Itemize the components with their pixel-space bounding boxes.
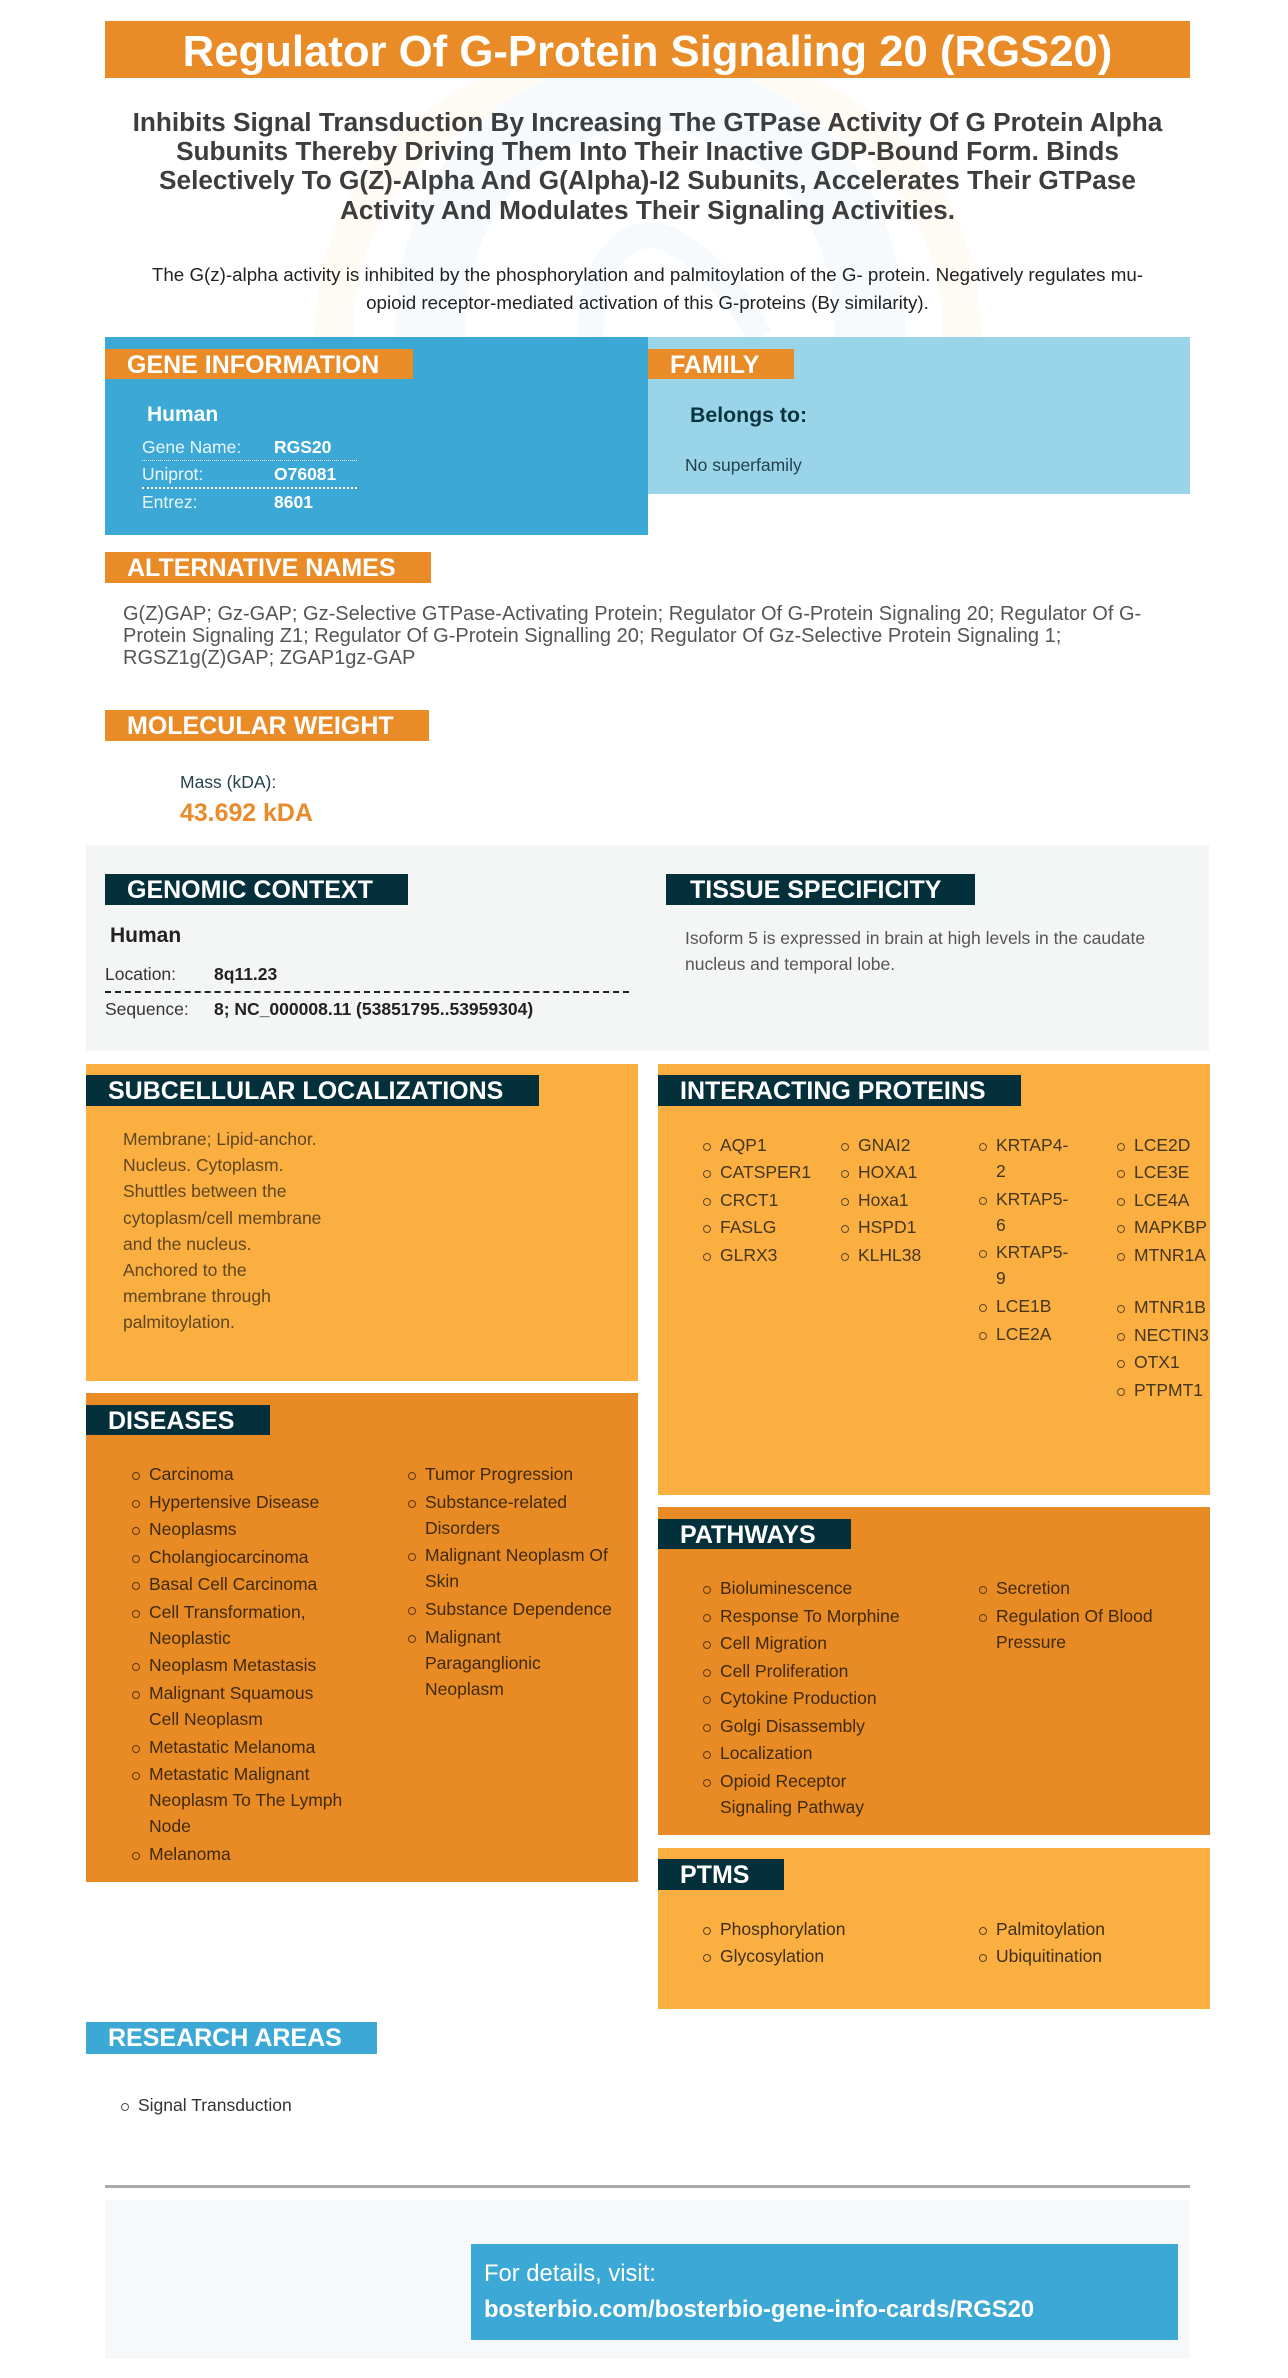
panel: interacting proteins xyxy=(658,1064,1210,1495)
ptm list: Glycosylation xyxy=(720,1946,824,1966)
disease list: Metastatic Melanoma xyxy=(149,1737,315,1757)
disease list: Tumor Progression xyxy=(425,1464,573,1484)
pathway list: Cytokine Production xyxy=(720,1688,877,1708)
species: human: Human xyxy=(110,924,181,947)
heading: interacting proteins: INTERACTING PROTEINS xyxy=(680,1077,986,1105)
disease list: Basal Cell Carcinoma xyxy=(149,1574,317,1594)
localization text xyxy=(123,1129,321,1332)
panel: gene information xyxy=(105,337,648,535)
heading: research areas: RESEARCH AREAS xyxy=(108,2024,342,2052)
protein list: KRTAP4- xyxy=(996,1135,1068,1155)
protein list: LCE2A xyxy=(996,1324,1051,1344)
alternative names text: Protein Signaling Z1; Regulator Of G-Protein Signalling 20; Regulator Of Gz-Selective Protein Signaling 1; xyxy=(123,625,1061,647)
disease list: Malignant Squamous xyxy=(149,1683,313,1703)
protein list: KRTAP5- xyxy=(996,1189,1068,1209)
disease list: Neoplastic xyxy=(149,1628,231,1648)
uniprot row: Uniprot: xyxy=(142,464,203,484)
panel: family xyxy=(648,337,1190,494)
gene name row: Gene Name: xyxy=(142,437,241,457)
entrez row: 8601 xyxy=(274,492,313,512)
disease list xyxy=(132,1464,612,1864)
pathway list: Regulation Of Blood xyxy=(996,1606,1153,1626)
heading: ptms: PTMS xyxy=(680,1861,749,1889)
subtitle: Subunits Thereby Driving Them Into Their Inactive GDP-Bound Form. Binds xyxy=(176,136,1119,166)
protein list: CATSPER1 xyxy=(720,1162,811,1182)
panel: diseases xyxy=(86,1393,638,1882)
pathway list: Bioluminescence xyxy=(720,1578,852,1598)
callout: details link xyxy=(471,2244,1178,2340)
protein list: Hoxa1 xyxy=(858,1190,909,1210)
heading: family xyxy=(648,349,794,379)
subtitle: Inhibits Signal Transduction By Increasing The GTPase Activity Of G Protein Alpha xyxy=(133,107,1162,137)
subtitle xyxy=(133,107,1162,225)
disease list: Cholangiocarcinoma xyxy=(149,1547,309,1567)
localization text: Anchored to the xyxy=(123,1260,247,1280)
pathway list: Localization xyxy=(720,1743,812,1763)
disease list: Substance-related xyxy=(425,1492,567,1512)
ptm list: Ubiquitination xyxy=(996,1946,1102,1966)
protein list: AQP1 xyxy=(720,1135,767,1155)
pathway list: Opioid Receptor xyxy=(720,1771,846,1791)
text: Signal Transduction xyxy=(138,2095,292,2115)
disease list: Neoplasm xyxy=(425,1679,504,1699)
subtitle: Activity And Modulates Their Signaling Activities. xyxy=(340,195,955,225)
heading: diseases xyxy=(86,1405,270,1435)
protein list: 6 xyxy=(996,1215,1006,1235)
tissue text xyxy=(685,928,1145,974)
protein list: CRCT1 xyxy=(720,1190,778,1210)
heading: pathways xyxy=(658,1519,851,1549)
pathway list: Cell Migration xyxy=(720,1633,827,1653)
pathway list: Pressure xyxy=(996,1632,1066,1652)
panel: subcellular localizations xyxy=(86,1064,638,1381)
protein list: OTX1 xyxy=(1134,1352,1180,1372)
mass label: Mass (kDA): xyxy=(180,772,276,792)
protein list: LCE3E xyxy=(1134,1162,1189,1182)
heading: ptms xyxy=(658,1859,784,1890)
protein list: KLHL38 xyxy=(858,1245,921,1265)
heading: alternative names: ALTERNATIVE NAMES xyxy=(127,554,396,582)
protein list: MAPKBP xyxy=(1134,1217,1207,1237)
localization text: membrane through xyxy=(123,1286,271,1306)
panel: genomic context and tissue specificity: 8; NC_000008.11 (53851795..53959304) xyxy=(214,999,533,1019)
disease list: Substance Dependence xyxy=(425,1599,612,1619)
alternative names text xyxy=(123,603,1141,669)
pathway list xyxy=(703,1578,1153,1817)
heading: family: FAMILY xyxy=(670,351,759,379)
subtitle: Selectively To G(Z)-Alpha And G(Alpha)-I2 Subunits, Accelerates Their GTPase xyxy=(159,165,1136,195)
entrez row xyxy=(142,492,313,512)
protein list: MTNR1B xyxy=(1134,1297,1206,1317)
disease list: Disorders xyxy=(425,1518,500,1538)
location row: 8q11.23 xyxy=(214,964,277,984)
protein list: GLRX3 xyxy=(720,1245,777,1265)
description: opioid receptor-mediated activation of this G-proteins (By similarity). xyxy=(366,292,929,313)
ptm list: Palmitoylation xyxy=(996,1919,1105,1939)
disease list: Neoplasm Metastasis xyxy=(149,1655,316,1675)
protein list: KRTAP5- xyxy=(996,1242,1068,1262)
disease list: Cell Transformation, xyxy=(149,1602,306,1622)
alternative names text: RGSZ1g(Z)GAP; ZGAP1gz-GAP xyxy=(123,647,415,669)
disease list: Malignant xyxy=(425,1627,501,1647)
pathway list: Cell Proliferation xyxy=(720,1661,848,1681)
pathway list: Secretion xyxy=(996,1578,1070,1598)
disease list: Hypertensive Disease xyxy=(149,1492,319,1512)
panel: genomic context and tissue specificity xyxy=(86,845,1209,1051)
no superfamily: No superfamily xyxy=(685,455,802,475)
disease list: Metastatic Malignant xyxy=(149,1764,310,1784)
localization text: Membrane; Lipid-anchor. xyxy=(123,1129,317,1149)
localization text: and the nucleus. xyxy=(123,1234,251,1254)
disease list: Malignant Neoplasm Of xyxy=(425,1545,608,1565)
heading: gene information: GENE INFORMATION xyxy=(127,351,379,379)
localization text: palmitoylation. xyxy=(123,1312,235,1332)
localization text: Nucleus. Cytoplasm. xyxy=(123,1155,283,1175)
heading: subcellular localizations: SUBCELLULAR LOCALIZATIONS xyxy=(108,1077,503,1105)
details url: bosterbio.com/bosterbio-gene-info-cards/RGS20 xyxy=(484,2296,1034,2323)
disease list: Cell Neoplasm xyxy=(149,1709,263,1729)
protein list: LCE4A xyxy=(1134,1190,1189,1210)
disease list: Skin xyxy=(425,1571,459,1591)
pathway list: Golgi Disassembly xyxy=(720,1716,865,1736)
disease list: Node xyxy=(149,1816,191,1836)
disease list: Neoplasms xyxy=(149,1519,237,1539)
heading: diseases: DISEASES xyxy=(108,1407,234,1435)
protein list: LCE1B xyxy=(996,1296,1051,1316)
mass value: 43.692 kDA xyxy=(180,799,313,827)
location row xyxy=(105,961,629,993)
protein list: HOXA1 xyxy=(858,1162,917,1182)
panel: ptms xyxy=(658,1848,1210,2009)
details label: For details, visit: xyxy=(484,2260,656,2287)
heading: pathways: PATHWAYS xyxy=(680,1521,816,1549)
ptm list xyxy=(703,1919,1105,1966)
tissue text: Isoform 5 is expressed in brain at high levels in the caudate xyxy=(685,928,1145,948)
title: Regulator Of G-Protein Signaling 20 (RGS20) xyxy=(183,27,1112,76)
ptm list: Phosphorylation xyxy=(720,1919,846,1939)
panel: pathways xyxy=(658,1507,1210,1835)
pathway list: Response To Morphine xyxy=(720,1606,900,1626)
disease list: Paraganglionic xyxy=(425,1653,541,1673)
protein list: GNAI2 xyxy=(858,1135,911,1155)
protein list: NECTIN3 xyxy=(1134,1325,1209,1345)
sequence row xyxy=(105,999,533,1019)
panel: footer xyxy=(105,2200,1190,2359)
gene name row xyxy=(142,434,357,461)
disease list: Carcinoma xyxy=(149,1464,234,1484)
location row: Location: xyxy=(105,964,176,984)
uniprot row xyxy=(142,461,357,489)
localization text: Shuttles between the xyxy=(123,1181,286,1201)
pathway list: Signaling Pathway xyxy=(720,1797,864,1817)
disease list: Neoplasm To The Lymph xyxy=(149,1790,342,1810)
protein list: PTPMT1 xyxy=(1134,1380,1203,1400)
sequence row: Sequence: xyxy=(105,999,189,1019)
disease list: Melanoma xyxy=(149,1844,231,1864)
species: human: Human xyxy=(147,403,218,426)
heading: genomic context: GENOMIC CONTEXT xyxy=(127,876,373,904)
belongs to: Belongs to: xyxy=(690,403,807,427)
alternative names text: G(Z)GAP; Gz-GAP; Gz-Selective GTPase-Activating Protein; Regulator Of G-Protein Signaling 20; Regulator Of G- xyxy=(123,603,1141,625)
localization text: cytoplasm/cell membrane xyxy=(123,1208,321,1228)
heading: tissue specificity: TISSUE SPECIFICITY xyxy=(690,876,941,904)
protein list: MTNR1A xyxy=(1134,1245,1206,1265)
protein list: FASLG xyxy=(720,1217,776,1237)
heading: molecular weight: MOLECULAR WEIGHT xyxy=(127,712,394,740)
protein list: HSPD1 xyxy=(858,1217,916,1237)
description xyxy=(152,264,1143,313)
gene name row: RGS20 xyxy=(274,437,331,457)
watermark xyxy=(315,78,981,337)
entrez row: Entrez: xyxy=(142,492,197,512)
protein list: LCE2D xyxy=(1134,1135,1190,1155)
description: The G(z)-alpha activity is inhibited by the phosphorylation and palmitoylation of the G- protein. Negatively regulates mu- xyxy=(152,264,1143,285)
protein list: 2 xyxy=(996,1161,1006,1181)
uniprot row: O76081 xyxy=(274,464,336,484)
tissue text: nucleus and temporal lobe. xyxy=(685,954,895,974)
protein list: 9 xyxy=(996,1268,1006,1288)
protein list xyxy=(703,1135,1209,1400)
